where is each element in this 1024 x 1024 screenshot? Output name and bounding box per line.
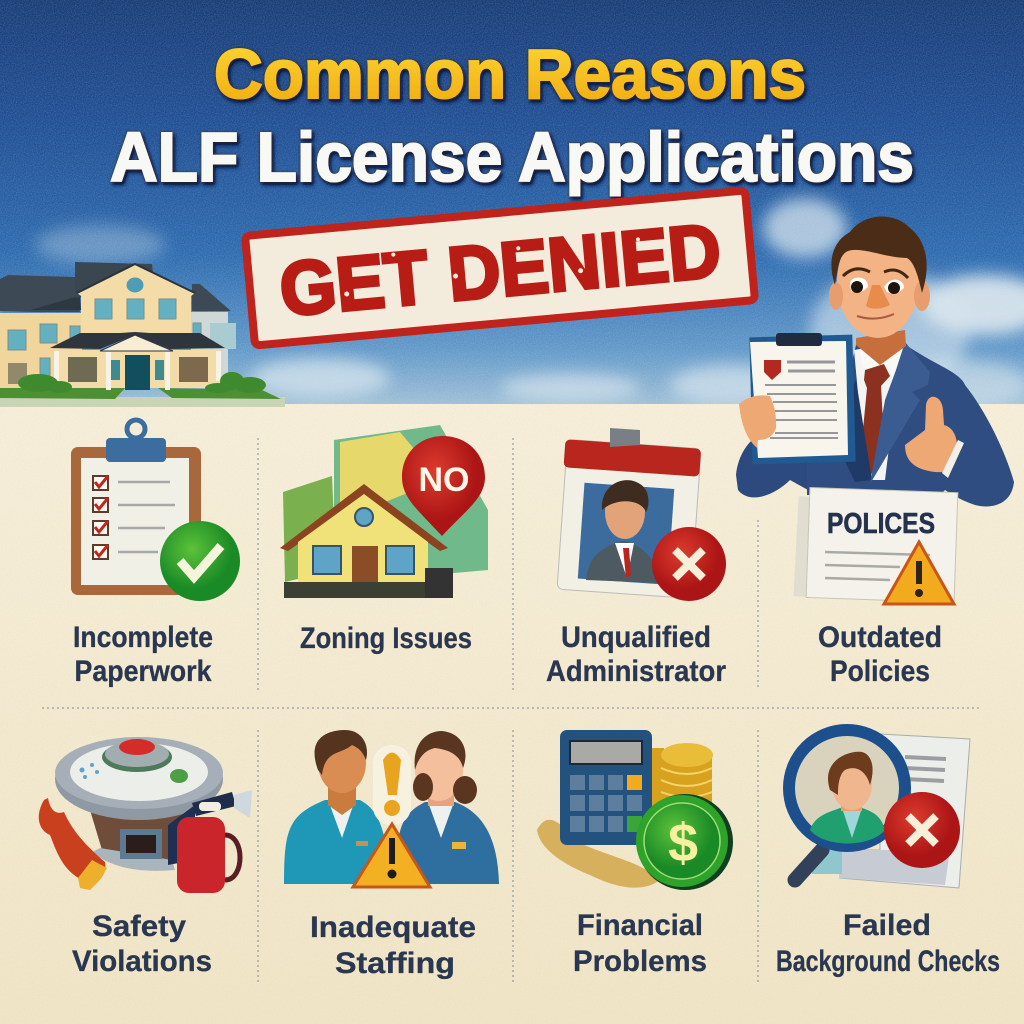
icon: magnifier over document with red X bbox=[789, 730, 970, 888]
label: Failed bbox=[843, 909, 931, 942]
label: Policies bbox=[830, 655, 930, 688]
item: inadequate staffing bbox=[284, 730, 499, 980]
item: unqualified administrator bbox=[546, 428, 726, 688]
icon: clipboard with green check bbox=[71, 420, 240, 601]
label: Zoning Issues bbox=[300, 622, 472, 655]
illustration: assisted living building bbox=[0, 262, 285, 407]
background: cream paper panel bbox=[0, 404, 1024, 1024]
label: Financial bbox=[577, 909, 703, 942]
label: Staffing bbox=[335, 947, 455, 980]
item: incomplete paperwork bbox=[71, 420, 240, 688]
item: financial problems bbox=[537, 730, 733, 978]
icon: two staff with warning bbox=[284, 730, 499, 887]
label: Incomplete bbox=[73, 621, 213, 654]
label: Inadequate bbox=[310, 911, 476, 944]
title: ALF License Applications: ALF License Applications bbox=[110, 118, 914, 196]
label: Paperwork bbox=[74, 655, 212, 688]
item: safety violations bbox=[39, 737, 252, 978]
item: outdated policies bbox=[793, 488, 958, 688]
title: Common Reasons: Common Reasons bbox=[214, 35, 806, 113]
label: Problems bbox=[573, 945, 707, 978]
icon: smoke detector, flame, extinguisher bbox=[39, 737, 252, 893]
icon: policies document with warning: POLICES bbox=[827, 508, 935, 540]
label: Violations bbox=[72, 945, 212, 978]
background: blue sky bbox=[0, 0, 1024, 410]
label: Safety bbox=[92, 910, 186, 943]
icon: calculator, coins, dollar: $ bbox=[668, 813, 698, 873]
icon: house with NO pin: NO bbox=[418, 461, 470, 499]
icon: calculator, coins, dollar bbox=[537, 730, 733, 890]
illustration: man in suit holding document bbox=[736, 216, 1014, 506]
label: Unqualified bbox=[561, 621, 711, 654]
label: Administrator bbox=[546, 655, 726, 688]
label: Outdated bbox=[818, 621, 942, 654]
dividers bbox=[42, 438, 980, 985]
icon: policies document with warning bbox=[793, 488, 958, 604]
item: failed background checks bbox=[776, 730, 1000, 978]
icon: house with NO pin bbox=[280, 425, 488, 598]
item: zoning issues bbox=[280, 425, 488, 655]
icon: ID badge with red X bbox=[555, 428, 726, 601]
stamp: GET DENIED: GET DENIED bbox=[276, 208, 724, 333]
